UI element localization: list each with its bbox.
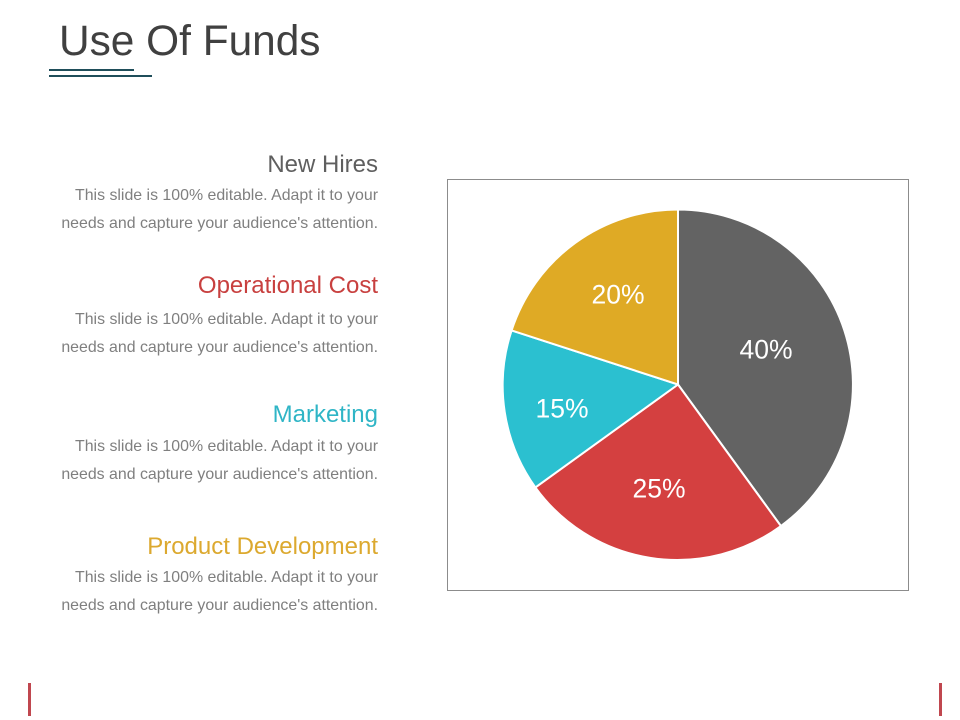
pie labels	[535, 280, 793, 504]
description: Operational Cost: This slide is 100% editable. Adapt it to your	[75, 311, 378, 328]
text block: Marketing	[61, 401, 378, 483]
pie labels: 40%	[739, 334, 793, 364]
pie labels: 15%	[535, 394, 589, 424]
corner tick right	[939, 683, 942, 716]
corner tick left	[28, 683, 31, 716]
heading: Operational Cost: Operational Cost	[198, 272, 378, 299]
heading: Marketing: Marketing	[273, 401, 378, 428]
title: Use Of Funds	[59, 17, 321, 64]
description: New Hires: This slide is 100% editable. Adapt it to your	[75, 187, 378, 204]
text block: New Hires	[61, 151, 378, 232]
text block: Product Development: needs and capture your audience's attention.	[61, 597, 378, 614]
text block: Marketing: needs and capture your audience's attention.	[61, 466, 378, 483]
slice: 20%	[512, 210, 678, 384]
pie labels: 25%	[632, 474, 686, 504]
text block: Product Development	[61, 533, 378, 614]
description: Marketing: This slide is 100% editable. Adapt it to your	[75, 438, 378, 455]
description: Product Development: This slide is 100% editable. Adapt it to your	[75, 569, 378, 586]
text block: New Hires: needs and capture your audience's attention.	[61, 215, 378, 232]
slice: 25%	[535, 384, 781, 560]
slice: 15%	[503, 330, 678, 487]
pie chart	[503, 210, 853, 560]
title underline	[49, 69, 152, 77]
slice: 40%	[678, 210, 853, 526]
pie labels: 20%	[591, 280, 645, 310]
text block: Operational Cost: needs and capture your audience's attention.	[61, 339, 378, 356]
heading: New Hires: New Hires	[267, 151, 378, 178]
heading: Product Development: Product Development	[147, 533, 378, 560]
text block: Operational Cost	[61, 272, 378, 356]
